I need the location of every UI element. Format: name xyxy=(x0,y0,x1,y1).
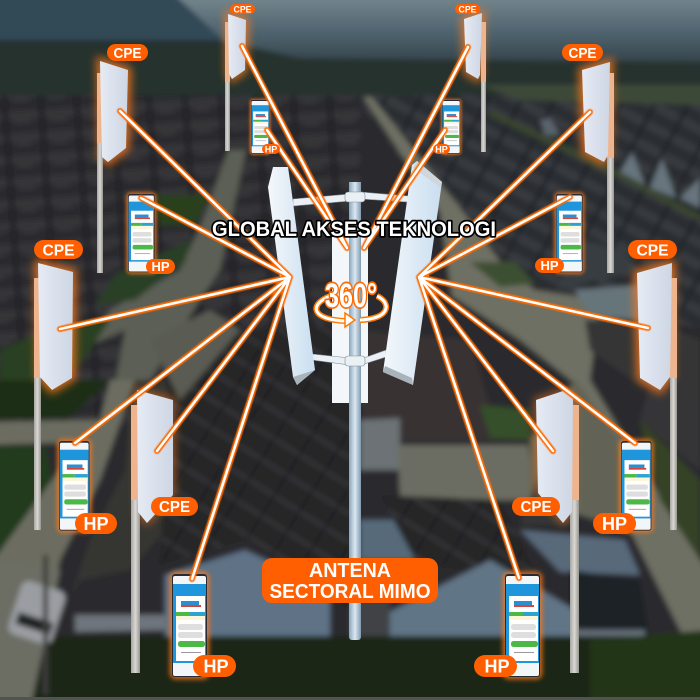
left sector panel xyxy=(268,167,315,385)
label: HP middle right: HP xyxy=(602,514,627,534)
label: HP bottom right xyxy=(474,655,517,677)
label: antena sectoral mimo: ANTENA xyxy=(309,560,391,582)
label: CPE upper right xyxy=(562,44,603,62)
360 degree rotation badge: 360° xyxy=(325,277,377,315)
center sector panel xyxy=(332,237,368,403)
360 degree rotation badge xyxy=(316,277,386,327)
CPE unit: middle right xyxy=(637,263,677,530)
label: HP bottom right: HP xyxy=(484,656,510,676)
phone: middle left xyxy=(58,440,90,531)
label: antena sectoral mimo xyxy=(262,558,438,603)
label: HP middle left xyxy=(75,513,117,534)
phone: bottom left xyxy=(171,573,208,678)
mounting brackets xyxy=(293,192,408,366)
right sector panel xyxy=(383,161,442,385)
label: HP middle right xyxy=(593,513,636,534)
signal lines xyxy=(60,46,648,579)
label: HP top right: HP xyxy=(435,144,448,154)
label: HP bottom left: HP xyxy=(203,656,229,676)
label: CPE upper left xyxy=(107,44,148,62)
label: HP upper left xyxy=(146,259,175,274)
label: CPE lower right: CPE xyxy=(520,499,552,516)
title: GLOBAL AKSES TEKNOLOGI xyxy=(212,218,496,241)
CPE unit: top left xyxy=(225,14,246,151)
phone: top left xyxy=(250,99,270,154)
CPE unit: middle left xyxy=(34,263,73,530)
CPE unit: lower left xyxy=(131,390,173,673)
signal lines glow xyxy=(60,46,648,579)
antenna tower xyxy=(268,161,442,640)
label: CPE middle right: CPE xyxy=(636,242,669,260)
label: CPE upper right: CPE xyxy=(568,46,597,62)
phone: upper right xyxy=(555,193,583,273)
phone: upper left xyxy=(127,193,155,273)
mast pole xyxy=(349,182,361,640)
label: CPE middle right xyxy=(628,240,677,260)
CPE unit: upper left xyxy=(97,61,128,273)
label: CPE middle left xyxy=(34,240,83,260)
label: antena sectoral mimo: SECTORAL MIMO xyxy=(270,581,430,603)
phone: top right xyxy=(441,99,461,154)
CPE unit: upper right xyxy=(582,62,614,273)
label: CPE lower left: CPE xyxy=(159,499,190,516)
label: CPE top right: CPE xyxy=(458,4,476,16)
CPE unit: lower right xyxy=(536,391,579,673)
label: HP middle left: HP xyxy=(83,514,109,534)
label: CPE top left: CPE xyxy=(234,4,252,16)
phone: middle right xyxy=(620,440,652,531)
label: CPE upper left: CPE xyxy=(114,46,142,62)
label: HP bottom left xyxy=(193,655,236,677)
label: HP upper right xyxy=(535,258,564,273)
label: CPE lower left xyxy=(151,497,198,516)
phone: bottom right xyxy=(504,573,541,678)
label: HP top left: HP xyxy=(265,144,277,154)
label: HP upper right: HP xyxy=(540,258,559,273)
label: HP top left xyxy=(262,144,280,154)
label: HP upper left: HP xyxy=(151,259,170,274)
CPE unit: top right xyxy=(464,13,486,152)
label: CPE lower right xyxy=(512,497,560,516)
label: CPE middle left: CPE xyxy=(42,242,75,260)
